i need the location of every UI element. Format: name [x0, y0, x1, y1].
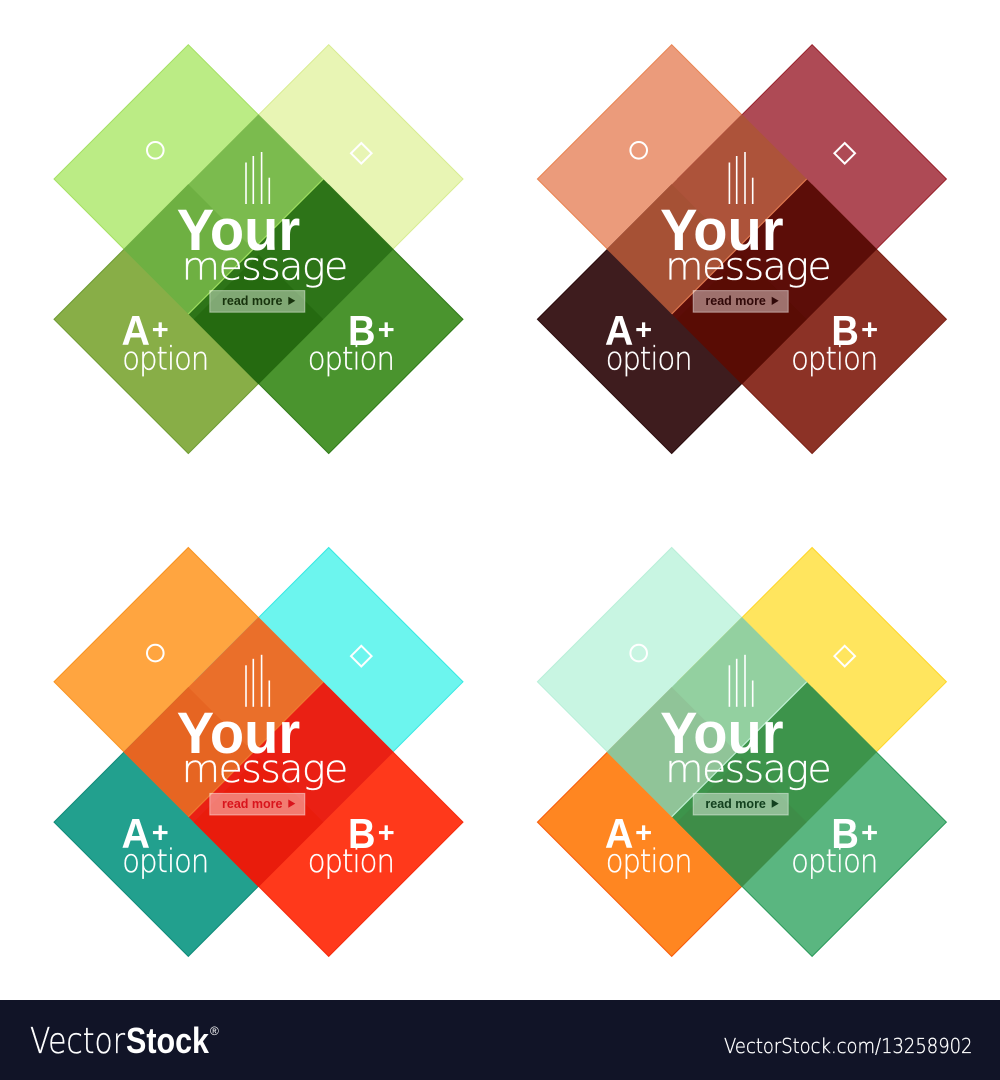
label: B+ option: [308, 307, 395, 377]
button: read more: [693, 793, 788, 815]
label: B+ option: B: [348, 810, 376, 857]
label: A+ option: option: [122, 842, 208, 880]
subheading: message: message: [182, 747, 347, 791]
overlap: right dark: [672, 682, 877, 887]
square: top right: [678, 548, 946, 816]
label: B+ option: +: [378, 817, 395, 849]
overlap: top light: [124, 114, 323, 314]
square: bottom right: [678, 185, 946, 454]
icon: circle: [630, 645, 647, 661]
panel: orange cyan red diagram: [54, 548, 463, 956]
footer image id: VectorStock.com/13258902: [724, 1034, 972, 1058]
icon: diamond: [834, 646, 855, 666]
label: A+ option: A: [605, 810, 633, 857]
overlap: right dark: [188, 179, 394, 384]
footer logo: Vector: [30, 1021, 125, 1062]
label: A+ option: +: [635, 314, 652, 346]
square: top right: [678, 45, 946, 313]
panel: maroon diagram: [537, 45, 946, 454]
heading: Your: Your: [660, 198, 784, 263]
overlap: right dark: [672, 179, 877, 384]
square: top left: [537, 548, 806, 816]
footer logo: ®: [210, 1024, 219, 1038]
icon: bars: [729, 152, 753, 204]
subheading: message: message: [665, 244, 830, 288]
label: B+ option: B: [348, 307, 376, 354]
button: read more: [693, 291, 788, 312]
square: bottom right: [678, 688, 946, 956]
footer logo: [30, 1020, 219, 1062]
label: A+ option: [122, 307, 208, 377]
label: B+ option: option: [791, 842, 877, 880]
label: A+ option: [122, 810, 208, 880]
label: A+ option: +: [635, 817, 652, 849]
label: B+ option: B: [831, 810, 859, 857]
label: A+ option: A: [122, 810, 150, 857]
square: bottom right: [194, 185, 463, 454]
square: top right: [194, 45, 463, 313]
icon: circle: [630, 142, 647, 159]
label: B+ option: option: [791, 339, 877, 377]
icon: bars: [246, 152, 269, 204]
overlap: top light: [607, 617, 807, 817]
icon: diamond: [834, 143, 855, 164]
icon: diamond: [351, 646, 372, 666]
button: read more: read more: [705, 294, 766, 308]
overlap: right dark: [188, 682, 394, 887]
label: B+ option: [791, 810, 878, 880]
label: B+ option: +: [861, 314, 878, 346]
overlap: left light: [124, 184, 253, 314]
label: A+ option: [605, 810, 692, 880]
button: read more: read more: [222, 797, 283, 811]
square: bottom left: [54, 185, 323, 454]
icon: circle: [147, 142, 164, 159]
overlap: bottom dark: [677, 757, 807, 887]
square: bottom right: [194, 688, 463, 956]
overlap: bottom dark: [677, 255, 807, 384]
icon: bars: [729, 655, 753, 707]
label: A+ option: option: [606, 842, 692, 880]
square: bottom left: [537, 688, 806, 956]
overlap: top light: [607, 114, 807, 314]
label: A+ option: A: [122, 307, 150, 354]
icon: bars: [246, 655, 269, 707]
panel: green diagram: [54, 45, 463, 454]
panel: mint yellow green diagram: [537, 548, 946, 956]
icon: diamond: [351, 143, 372, 164]
button: read more: [210, 291, 305, 312]
label: B+ option: [791, 307, 878, 377]
label: A+ option: +: [152, 314, 169, 346]
subheading: message: message: [665, 747, 830, 791]
button: read more: [210, 793, 305, 815]
square: bottom left: [537, 185, 806, 454]
overlap: left light: [607, 184, 736, 314]
label: B+ option: B: [831, 307, 859, 354]
heading: Your: Your: [177, 198, 300, 263]
square: top left: [54, 548, 323, 816]
icon: circle: [147, 645, 164, 661]
footer bar: [0, 1000, 1000, 1080]
overlap: left light: [124, 687, 253, 817]
label: B+ option: option: [308, 339, 394, 377]
button: read more: read more: [705, 797, 766, 811]
overlap: top light: [124, 617, 323, 817]
button: read more: read more: [222, 294, 283, 308]
label: A+ option: option: [606, 339, 692, 377]
footer logo: Stock: [126, 1020, 210, 1061]
label: B+ option: option: [308, 842, 394, 880]
label: A+ option: A: [605, 307, 633, 354]
overlap: left light: [607, 687, 736, 817]
square: top right: [194, 548, 463, 816]
label: A+ option: +: [152, 817, 169, 849]
label: B+ option: +: [861, 817, 878, 849]
overlap: bottom dark: [194, 757, 323, 887]
label: A+ option: option: [122, 339, 208, 377]
square: top left: [537, 45, 806, 313]
heading: Your: Your: [660, 701, 784, 766]
subheading: message: message: [182, 244, 347, 288]
overlap: bottom dark: [194, 255, 323, 384]
label: B+ option: [308, 810, 395, 880]
heading: Your: Your: [177, 701, 300, 766]
label: B+ option: +: [378, 314, 395, 346]
square: top left: [54, 45, 323, 313]
label: A+ option: [605, 307, 692, 377]
square: bottom left: [54, 688, 323, 956]
